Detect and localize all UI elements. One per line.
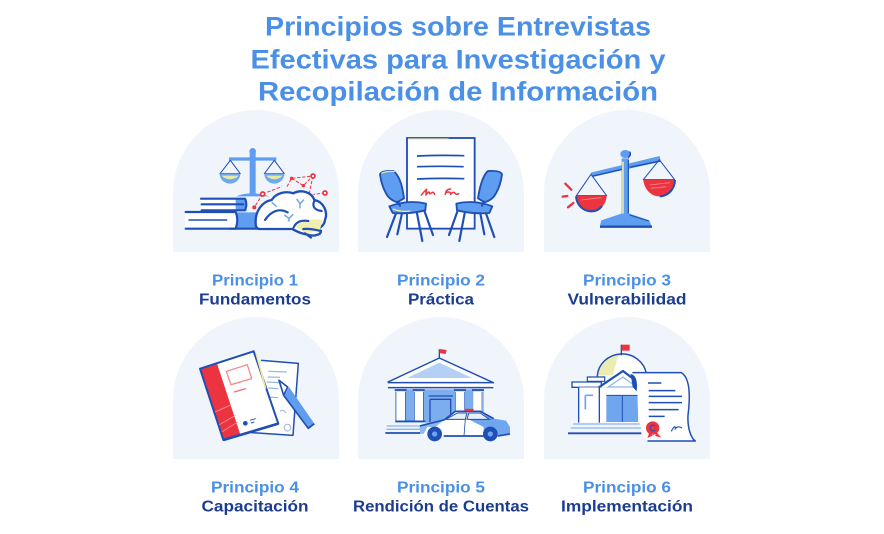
arch background 2 — [358, 110, 524, 252]
icon: notebook, paper and pencil — [200, 351, 314, 440]
label: principio 1: Principio 1 — [212, 272, 298, 290]
arch background 3 — [544, 110, 710, 252]
title — [250, 12, 666, 106]
icon: government building and certificate — [568, 345, 695, 441]
label: principio 4 — [202, 480, 308, 516]
icon: document and two chairs — [380, 138, 502, 241]
label: principio 6 — [561, 480, 693, 516]
label: principio 6: Principio 6 — [583, 480, 671, 496]
label: principio 2 — [397, 272, 485, 308]
left chair — [380, 171, 404, 202]
label: principio 6: Implementación — [561, 498, 693, 516]
label: principio 5: Rendición de Cuentas — [353, 498, 529, 516]
label: principio 2: Práctica — [408, 292, 474, 308]
panel: principio 2 — [358, 110, 524, 252]
right chair — [478, 171, 502, 202]
title: Principios sobre Entrevistas — [265, 12, 651, 42]
panel: principio 4 — [173, 317, 339, 459]
network lines — [254, 176, 325, 207]
icon: courthouse and police car — [385, 349, 510, 441]
label: principio 3 — [568, 272, 686, 308]
label: principio 5: Principio 5 — [397, 480, 485, 496]
arch background 6 — [544, 317, 710, 459]
arch background 5 — [358, 317, 524, 459]
icon: scales, books and brain — [185, 148, 327, 238]
certificate — [633, 373, 695, 441]
label: principio 5 — [353, 480, 529, 516]
brain — [256, 191, 326, 236]
title: Recopilación de Información — [258, 76, 658, 106]
panel: principio 1 — [173, 110, 339, 252]
car — [419, 411, 510, 437]
panel: principio 5 — [358, 317, 524, 459]
label: principio 3: Principio 3 — [583, 272, 671, 290]
arch background 1 — [173, 110, 339, 252]
title: Efectivas para Investigación y — [250, 44, 666, 74]
label: principio 3: Vulnerabilidad — [568, 292, 686, 308]
label: principio 4: Principio 4 — [211, 480, 299, 496]
panel: principio 3 — [544, 110, 710, 252]
books — [201, 198, 247, 211]
label: principio 4: Capacitación — [202, 498, 308, 516]
arch background 4 — [173, 317, 339, 459]
panel: principio 6 — [544, 317, 710, 459]
label: principio 2: Principio 2 — [397, 272, 485, 290]
label: principio 1: Fundamentos — [199, 292, 311, 308]
icon: unbalanced scale — [563, 150, 675, 227]
label: principio 1 — [199, 272, 311, 308]
